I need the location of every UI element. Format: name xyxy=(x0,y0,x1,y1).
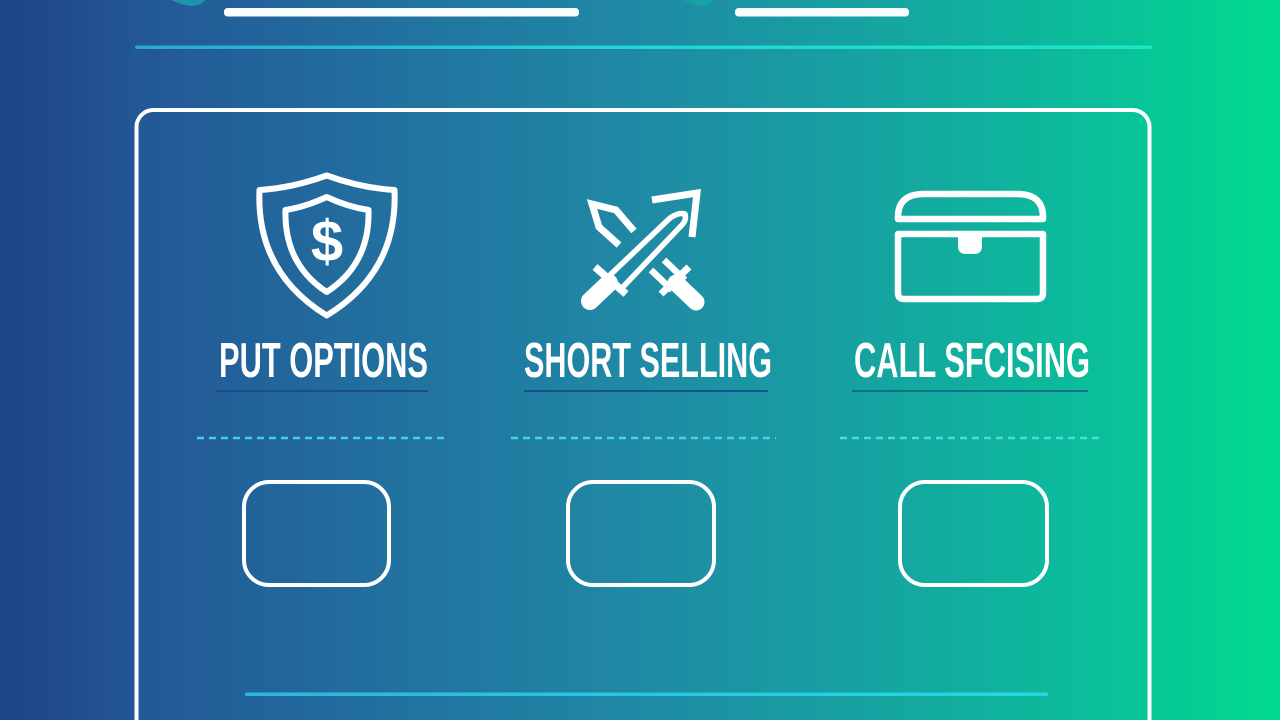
front sword arrowhead xyxy=(652,193,697,237)
empty value box: call selling xyxy=(900,482,1047,585)
top header fragment xyxy=(171,0,909,16)
main panel outline xyxy=(136,110,1150,720)
column: call selling xyxy=(840,194,1101,585)
empty value box: short selling xyxy=(568,482,714,585)
underline: call selling xyxy=(852,390,1088,392)
right header bar xyxy=(735,8,909,16)
dashed divider: short selling xyxy=(511,437,776,439)
label: put options: PUT OPTIONS xyxy=(219,334,428,388)
dashed divider: call selling xyxy=(840,437,1101,439)
chest lid xyxy=(898,194,1043,219)
front sword blade xyxy=(609,214,685,289)
underline: short selling xyxy=(524,390,768,392)
label: call selling: CALL SFCISING xyxy=(854,334,1090,388)
icon: cropped left header icon xyxy=(171,0,205,6)
dashed divider: put options xyxy=(197,437,445,439)
icon: treasure chest xyxy=(898,194,1043,299)
rear sword blade stubs and guard xyxy=(651,270,672,290)
underline: put options xyxy=(216,390,428,392)
icon: shield with dollar sign xyxy=(259,176,395,316)
chest body xyxy=(898,234,1043,299)
front sword handle xyxy=(590,283,609,301)
icon: crossed swords with arrow tip xyxy=(590,193,697,302)
column: short selling xyxy=(511,193,776,585)
column: put options xyxy=(197,176,445,585)
empty value box: put options xyxy=(244,482,389,585)
left header bar xyxy=(224,8,579,16)
label: short selling: SHORT SELLING xyxy=(524,334,772,388)
rear sword tip xyxy=(592,204,634,245)
icon: cropped right header icon xyxy=(683,0,712,6)
front sword guard xyxy=(595,267,626,294)
chest latch xyxy=(958,235,982,254)
top divider line xyxy=(135,46,1152,49)
bottom divider line xyxy=(245,692,1048,696)
rear sword handle xyxy=(676,283,696,302)
icon: shield with dollar sign: $ xyxy=(311,209,343,274)
